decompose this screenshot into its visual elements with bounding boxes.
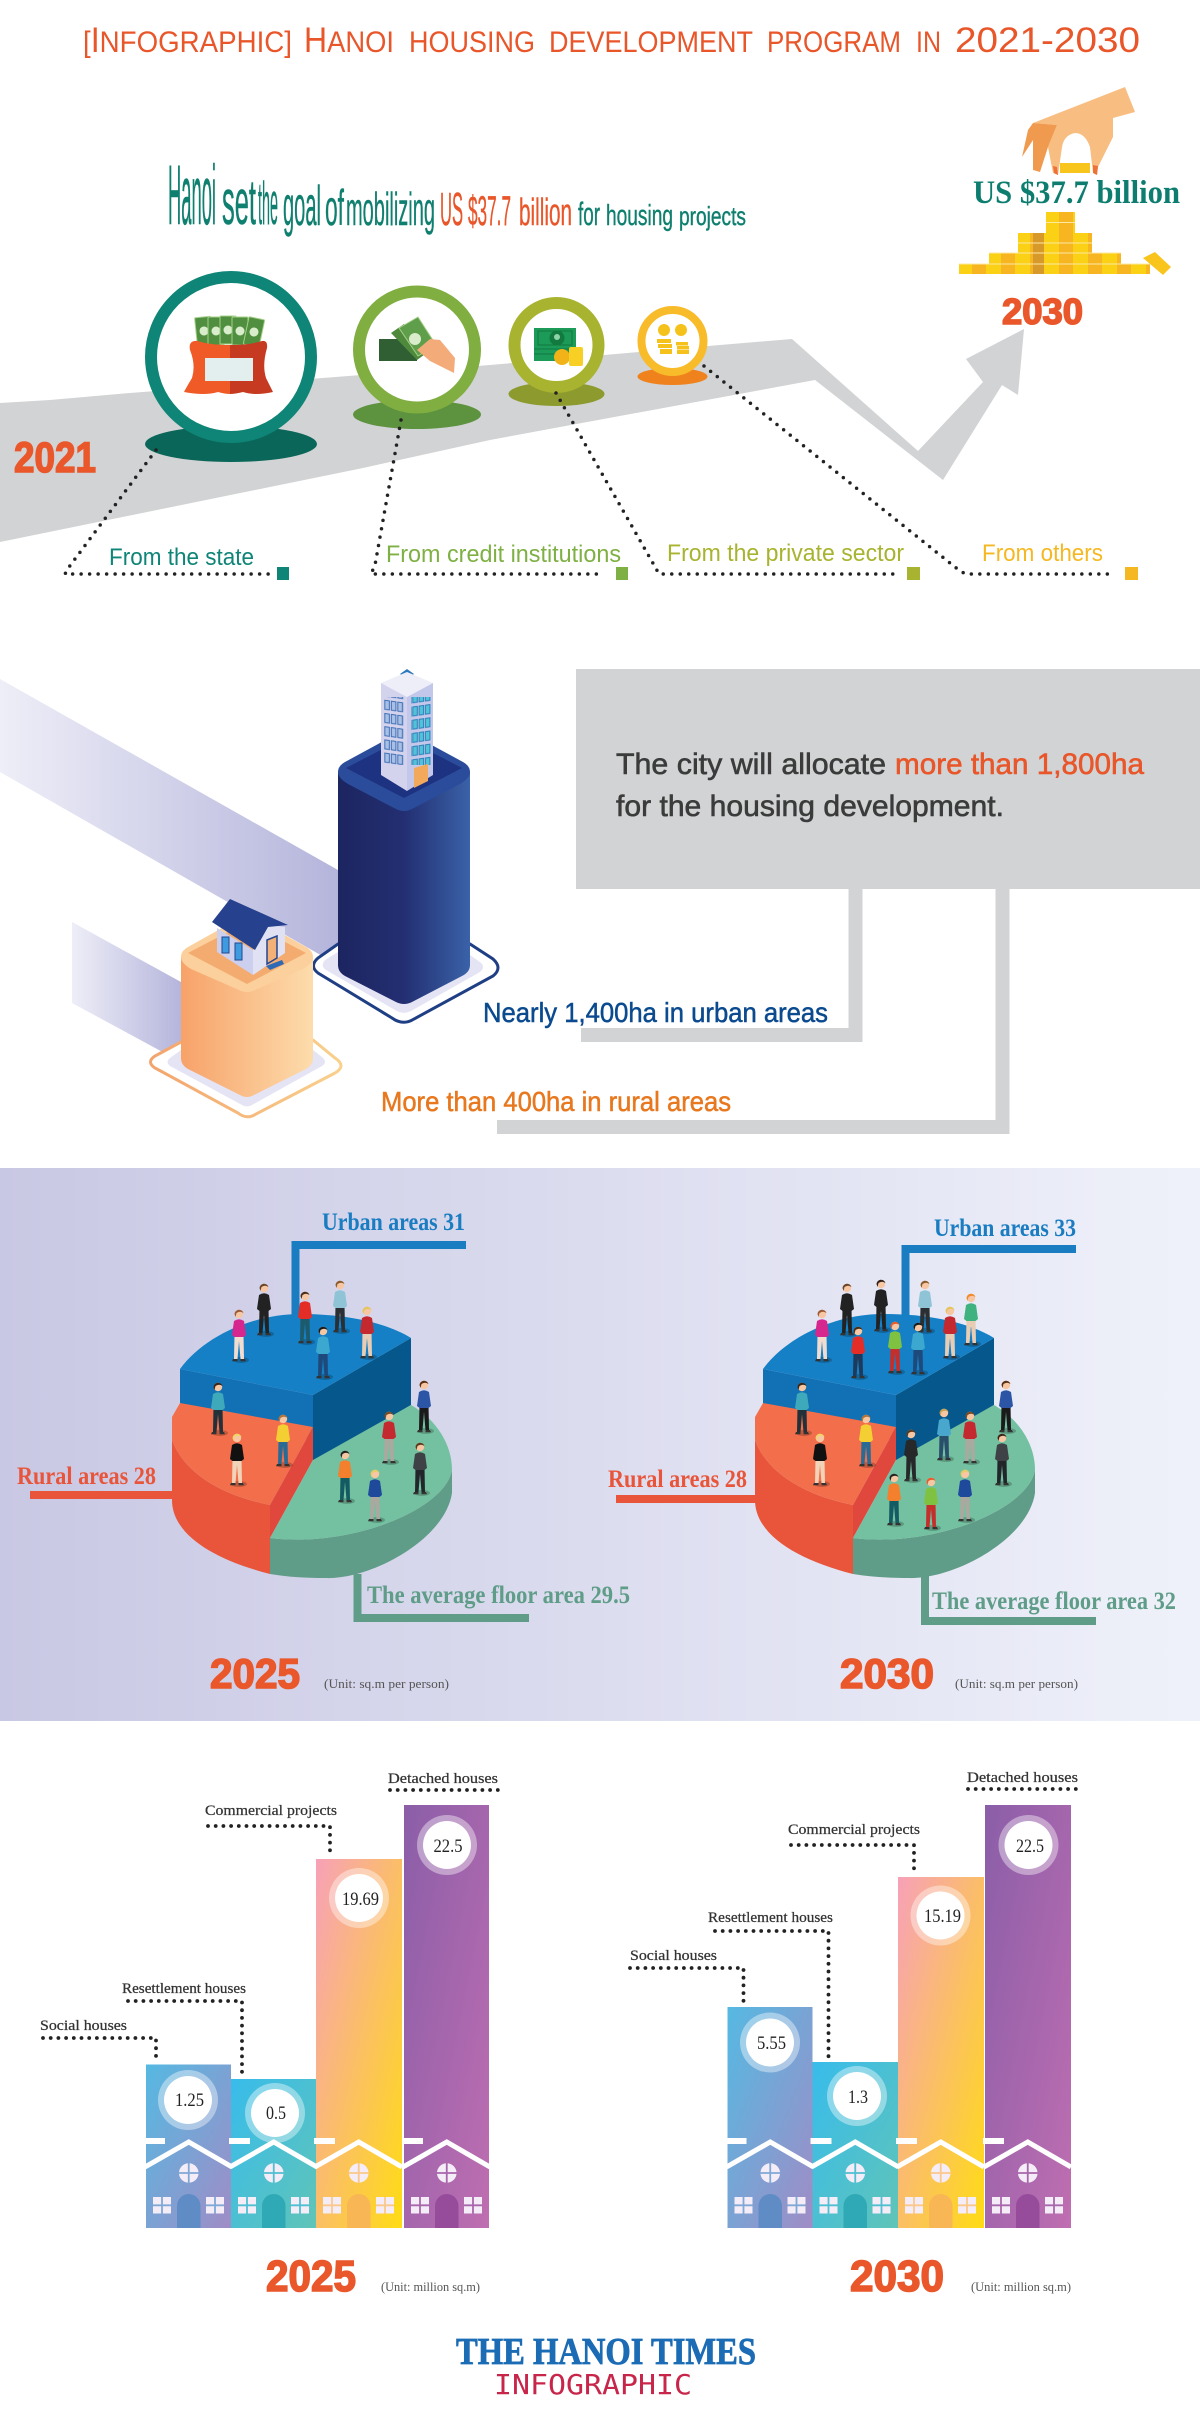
land shadow bands <box>0 679 338 1062</box>
bar: commercial projects 2025 <box>205 1803 402 2228</box>
bar: commercial projects 2030 <box>788 1822 984 2228</box>
text: allocation statement: The city will allocate <box>616 748 886 781</box>
subtitle: the <box>258 170 278 237</box>
value label: US $37.7 billion: US $37.7 billion <box>973 175 1180 211</box>
leader: average 2025: The average floor area 29.5 <box>367 1582 630 1609</box>
people on pie 2030 <box>795 1280 1016 1531</box>
bar: commercial projects 2030: 15.19 <box>924 1906 961 1927</box>
leader: average 2030: The average floor area 32 <box>932 1588 1176 1615</box>
title: PROGRAM <box>767 26 901 59</box>
bar: resettlement houses 2025: 0.5 <box>266 2103 286 2124</box>
year: 2030 floor area: 2030 <box>840 1650 934 1697</box>
source: from the state: From the state <box>109 544 254 571</box>
upward gray arrow <box>0 329 1024 542</box>
bar: detached houses 2025 <box>388 1771 503 2228</box>
bar: resettlement houses 2025 <box>122 1981 317 2228</box>
leader: average 2030 <box>925 1576 1176 1621</box>
subtitle: of <box>325 180 344 236</box>
title <box>83 21 1140 60</box>
leader: urban 2025 <box>296 1209 466 1315</box>
leader: rural 2025: Rural areas 28 <box>17 1463 156 1490</box>
subtitle: for <box>578 196 600 232</box>
icon: banknotes and coins <box>534 328 583 366</box>
icon: hand with cash <box>379 317 455 373</box>
connector: rural <box>497 889 1002 1127</box>
label: rural hectares: More than 400ha in rural areas <box>381 1086 731 1117</box>
bar: resettlement houses 2025: Resettlement houses <box>122 1981 246 1997</box>
logo <box>456 2331 756 2401</box>
unit note: (Unit: sq.m per person) <box>955 1676 1078 1691</box>
icon: hand placing gold <box>1022 87 1135 175</box>
year: 2025 floor area: 2025 <box>210 1650 300 1697</box>
bar: resettlement houses 2030 <box>708 1910 898 2228</box>
panel: floor area background <box>0 1168 1200 1721</box>
year: 2025 housing: 2025 <box>266 2252 356 2301</box>
bar: social houses 2030: Social houses <box>630 1948 717 1964</box>
people on pie 2025 <box>211 1281 434 1523</box>
bar: detached houses 2025: Detached houses <box>388 1771 498 1787</box>
year label: 2030: 2030 <box>1002 291 1083 332</box>
leader: urban 2025: Urban areas 31 <box>322 1209 465 1236</box>
subtitle: billion <box>519 192 572 234</box>
source: from the state <box>65 277 317 580</box>
text: allocation statement: for the housing development. <box>616 790 1004 823</box>
subtitle: mobilizing <box>346 183 435 235</box>
subtitle: goal <box>283 174 321 237</box>
source: from others: From others <box>982 540 1103 567</box>
bar chart: 2030 housing <box>630 1770 1082 2228</box>
text: allocation statement: more than 1,800ha <box>895 748 1144 781</box>
bar: social houses 2030 <box>630 1948 814 2228</box>
leader: average 2025 <box>358 1574 630 1618</box>
bar: commercial projects 2025: Commercial projects <box>205 1803 337 1819</box>
bar: commercial projects 2025: 19.69 <box>342 1889 379 1910</box>
leader: rural 2030: Rural areas 28 <box>608 1466 747 1493</box>
source: from credit institutions <box>353 292 628 580</box>
logo: INFOGRAPHIC <box>494 2368 692 2401</box>
chart: 2025 floor area pie <box>17 1209 630 1618</box>
title: 2021-2030 <box>955 21 1140 60</box>
connector: urban <box>581 889 856 1035</box>
subtitle: $37.7 <box>468 187 511 234</box>
source: from others <box>638 310 1138 580</box>
source: from the private sector: From the private sector <box>667 540 904 567</box>
bar: commercial projects 2030: Commercial projects <box>788 1822 920 1838</box>
leader: urban 2030 <box>906 1215 1076 1315</box>
panel: land allocation <box>576 669 1200 889</box>
year label: 2021: 2021 <box>14 434 96 482</box>
subtitle: projects <box>679 201 746 231</box>
bar chart: 2025 housing <box>40 1771 503 2228</box>
subtitle: US <box>440 183 463 235</box>
label: urban hectares: Nearly 1,400ha in urban areas <box>483 997 828 1028</box>
source: from credit institutions: From credit institutions <box>386 541 621 568</box>
title: DEVELOPMENT <box>549 26 753 59</box>
year: 2030 housing: 2030 <box>850 2252 944 2301</box>
small skyscraper <box>381 669 433 791</box>
leader: urban 2030: Urban areas 33 <box>934 1215 1076 1242</box>
bar: resettlement houses 2030: 1.3 <box>848 2087 868 2108</box>
small house <box>212 899 288 975</box>
logo: THE HANOI TIMES <box>456 2331 756 2373</box>
bar: social houses 2025: Social houses <box>40 2018 127 2034</box>
source: from the private sector <box>508 303 920 580</box>
icon: coin stacks <box>657 324 689 354</box>
bar: detached houses 2030: 22.5 <box>1016 1836 1044 1857</box>
icon: gold bars <box>959 212 1171 275</box>
rural tower <box>150 899 341 1117</box>
bar: social houses 2025 <box>40 2018 232 2228</box>
subtitle: housing <box>606 200 673 232</box>
title: IN <box>916 26 941 59</box>
bar: social houses 2025: 1.25 <box>175 2090 204 2111</box>
chart: 2030 floor area pie <box>608 1215 1176 1621</box>
unit note: (Unit: million sq.m) <box>971 2279 1071 2294</box>
bar: detached houses 2030 <box>967 1770 1082 2228</box>
unit note: (Unit: million sq.m) <box>381 2279 480 2294</box>
title: HANOI <box>304 21 394 60</box>
bar: detached houses 2030: Detached houses <box>967 1770 1078 1786</box>
text: allocation statement <box>616 748 1144 823</box>
subtitle: Hanoi <box>168 148 216 242</box>
icon: money bag <box>184 316 273 394</box>
title: HOUSING <box>409 26 535 59</box>
subtitle: set <box>222 166 256 238</box>
subtitle <box>168 148 746 242</box>
unit note: (Unit: sq.m per person) <box>324 1676 449 1691</box>
bar: detached houses 2025: 22.5 <box>434 1836 462 1857</box>
urban tower <box>314 669 498 1022</box>
bar: social houses 2030: 5.55 <box>757 2033 786 2054</box>
bar: resettlement houses 2030: Resettlement houses <box>708 1910 833 1926</box>
title: [INFOGRAPHIC] <box>83 21 292 60</box>
